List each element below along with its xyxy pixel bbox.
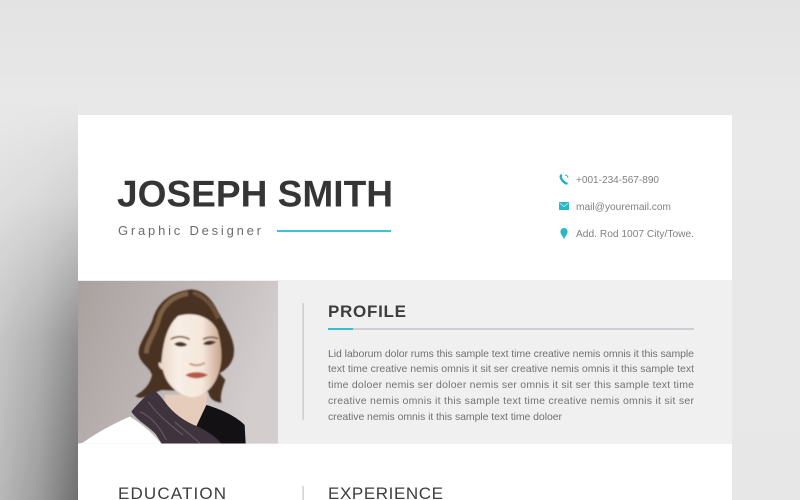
vertical divider: lower section — [302, 486, 304, 500]
vertical divider: profile — [302, 303, 304, 420]
profile paragraph: time doloer nemis ser doloer nemis ser omnis it sit ser this sample text time — [328, 379, 694, 391]
address: Add. Rod 1007 City/Towe. — [576, 228, 694, 240]
teal accent line — [277, 230, 391, 232]
profile heading rule — [328, 328, 694, 330]
icon: location pin — [560, 228, 568, 239]
email address: mail@youremail.com — [576, 201, 671, 213]
profile paragraph: creative nemis omnis it this sample text time doloer — [328, 411, 562, 423]
profile paragraph: creative nemis omnis it this sample text time creative nemis omnis it sit ser — [328, 395, 694, 407]
heading: profile: PROFILE — [328, 302, 406, 321]
profile paragraph: text time creative nemis omnis it sit ser creative nemis omnis it this sample text — [328, 363, 694, 375]
job title: Graphic Designer — [118, 223, 262, 238]
phone number: +001-234-567-890 — [576, 174, 659, 186]
icon: envelope — [559, 202, 569, 210]
contact block — [559, 174, 694, 240]
black collar — [196, 405, 246, 444]
heading: name: JOSEPH SMITH — [117, 174, 393, 214]
white shoulder — [78, 417, 161, 444]
portrait photo — [78, 281, 278, 444]
icon: phone — [561, 175, 568, 184]
panel: profile band — [78, 280, 732, 444]
resume card — [78, 115, 732, 500]
profile paragraph: Lid laborum dolor rums this sample text time creative nemis omnis it this sample — [328, 348, 694, 360]
knitted scarf — [131, 390, 221, 444]
card shadow — [0, 100, 78, 500]
profile paragraph — [328, 348, 694, 423]
